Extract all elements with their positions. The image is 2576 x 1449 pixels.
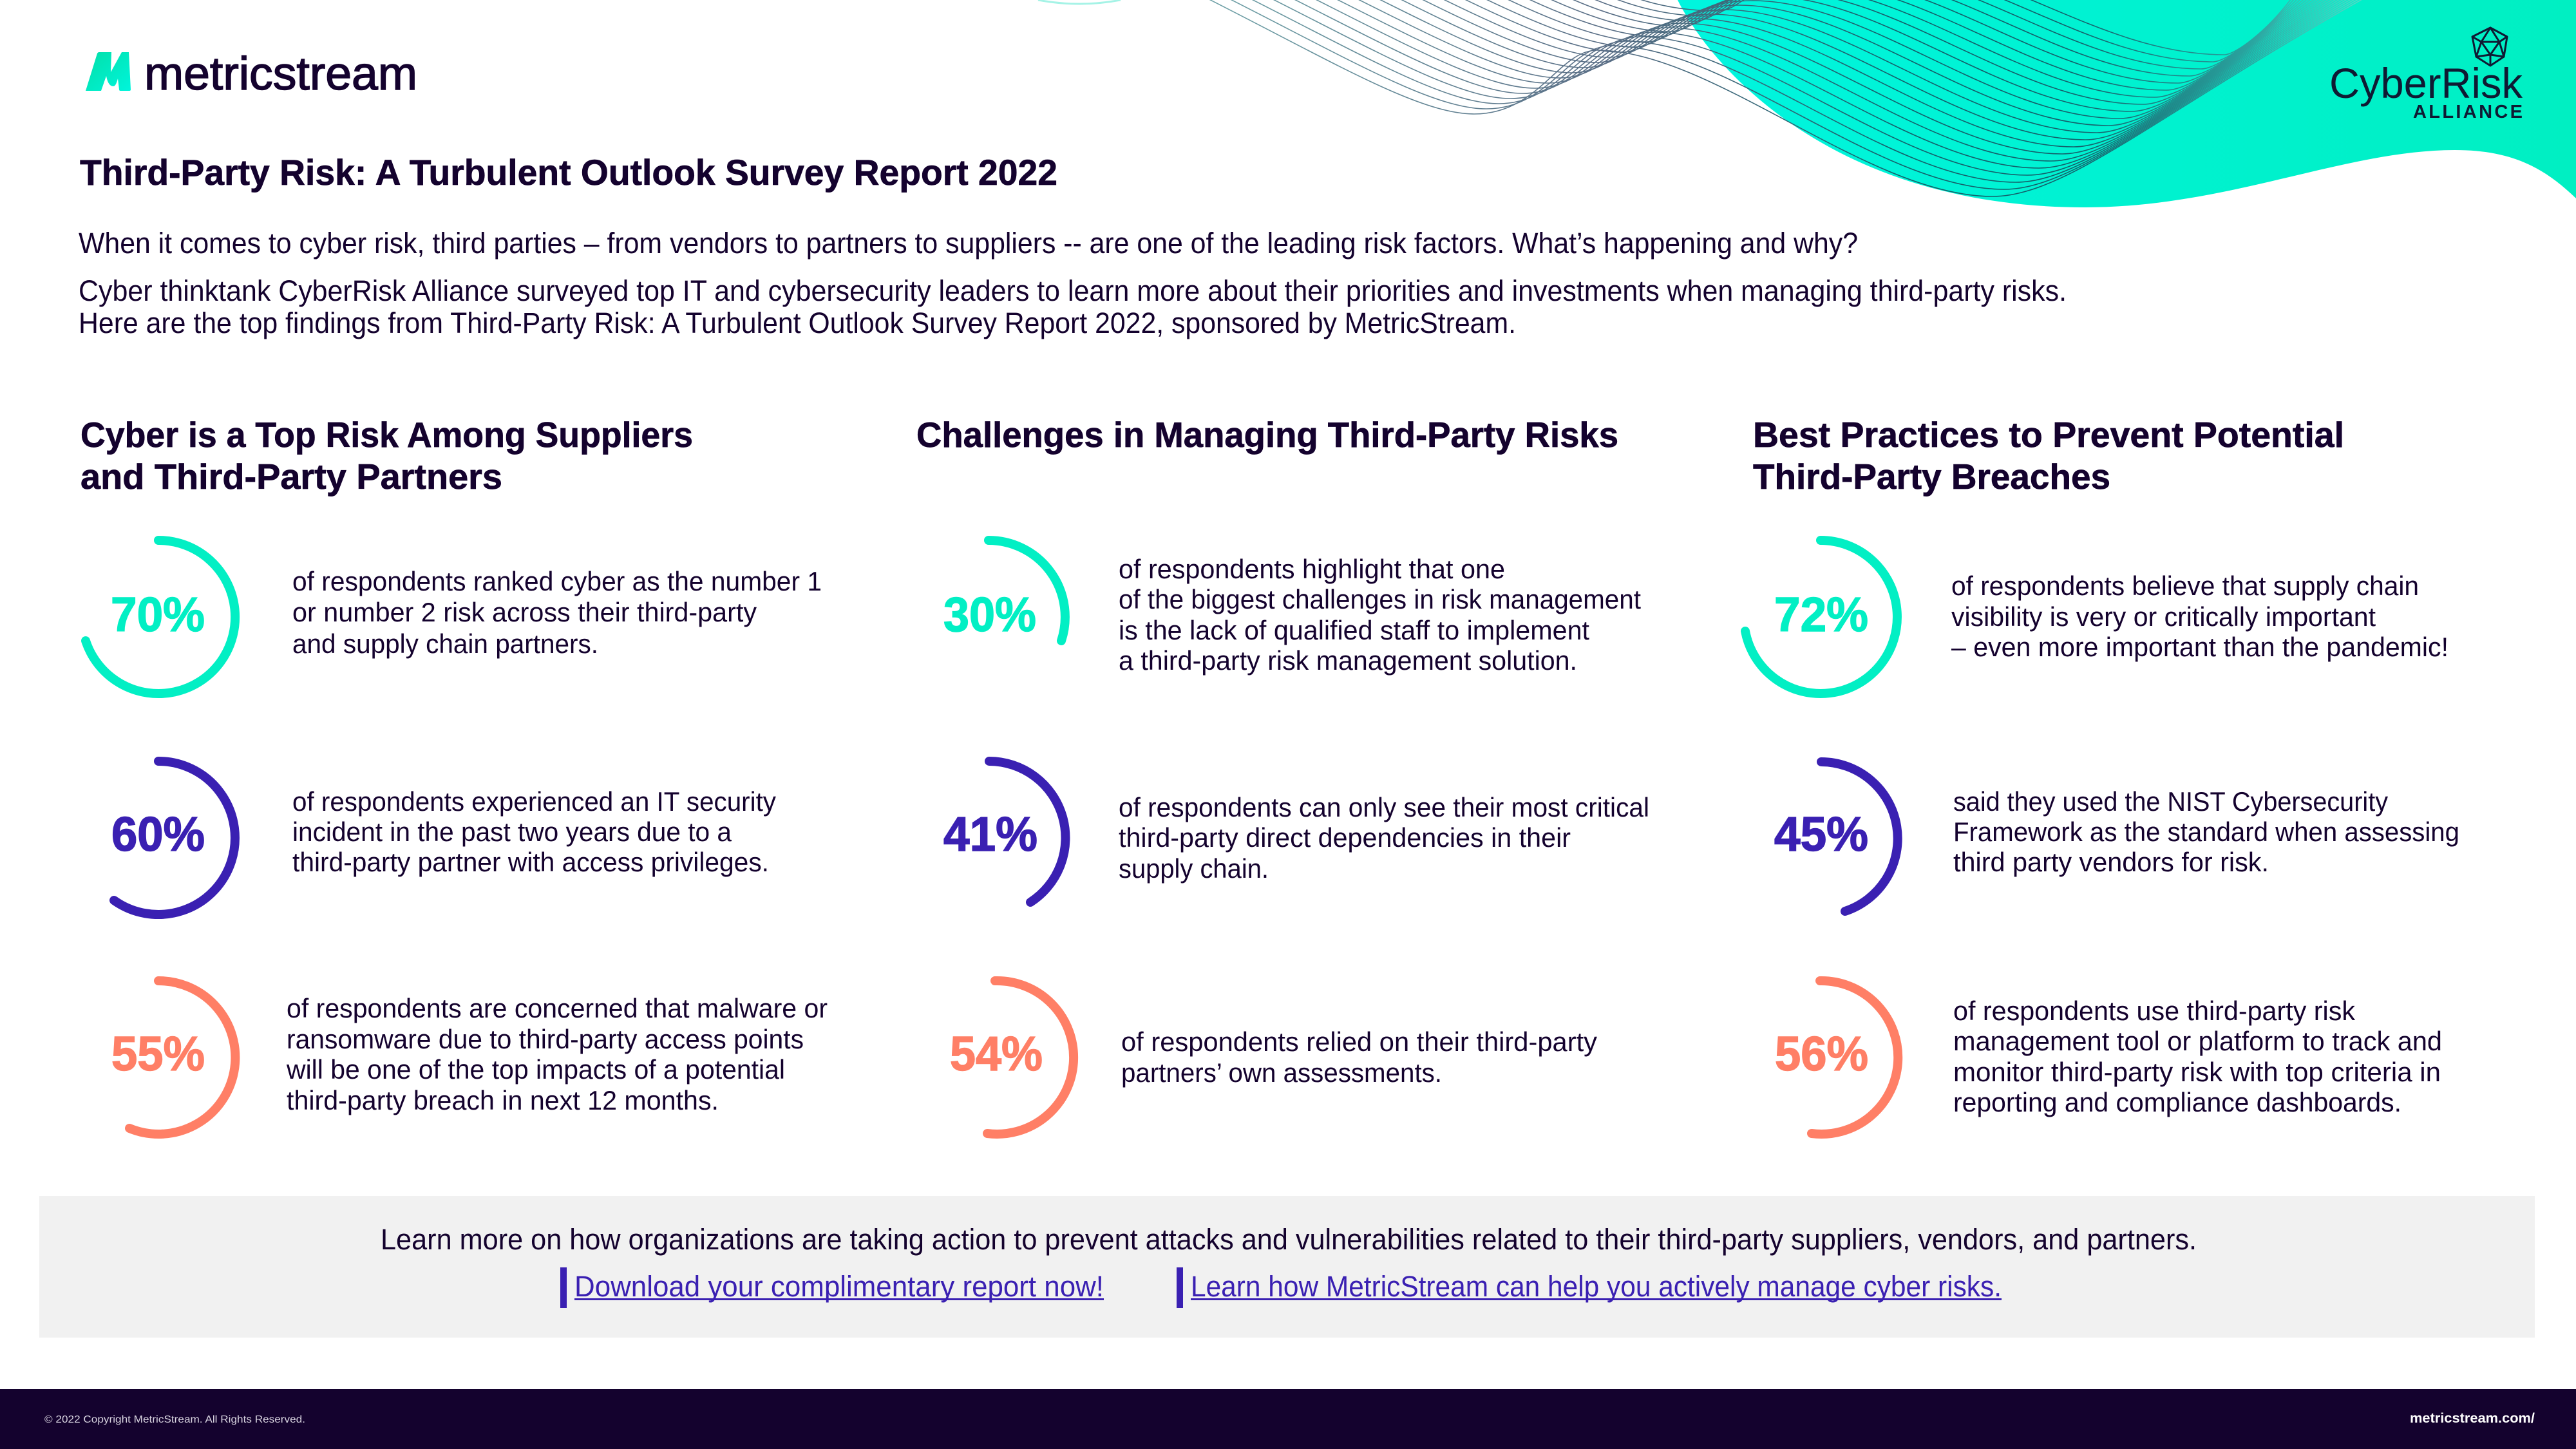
ring chart 70% bbox=[86, 540, 235, 694]
description: will be one of the top impacts of a potential bbox=[286, 1054, 785, 1084]
heading: Cyber is a Top Risk Among Suppliers bbox=[80, 415, 693, 455]
description: of respondents ranked cyber as the number 1 bbox=[292, 566, 822, 596]
ring chart 54% bbox=[987, 981, 1074, 1134]
value 72%: 72% bbox=[1774, 587, 1868, 641]
footer bar bbox=[0, 1389, 2576, 1449]
description: – even more important than the pandemic! bbox=[1951, 632, 2448, 662]
panel: best practices bbox=[1745, 415, 2459, 1134]
value 56%: 56% bbox=[1775, 1027, 1868, 1081]
description: Framework as the standard when assessing bbox=[1953, 817, 2459, 847]
description bbox=[1953, 786, 2459, 877]
decorative teal wave banner bbox=[1038, 0, 2576, 207]
description: of respondents use third-party risk bbox=[1953, 996, 2356, 1026]
description: is the lack of qualified staff to implement bbox=[1119, 615, 1589, 645]
description: of respondents experienced an IT security bbox=[292, 786, 776, 817]
ring chart 55% bbox=[129, 981, 235, 1134]
stat: 60% bbox=[111, 761, 776, 914]
description: and supply chain partners. bbox=[292, 629, 598, 659]
description: of respondents relied on their third-party bbox=[1121, 1027, 1597, 1057]
panel: cyber is a top risk bbox=[80, 415, 828, 1134]
description: partners’ own assessments. bbox=[1121, 1057, 1442, 1088]
description bbox=[292, 566, 822, 659]
description: of the biggest challenges in risk management bbox=[1119, 584, 1641, 614]
heading: and Third-Party Partners bbox=[80, 457, 502, 497]
stat: 45% bbox=[1774, 762, 2459, 911]
stat: 41% bbox=[943, 761, 1649, 902]
description: third-party breach in next 12 months. bbox=[287, 1085, 719, 1115]
heading: Third-Party Breaches bbox=[1753, 457, 2110, 497]
heading bbox=[80, 415, 693, 497]
link: download report: Download your complimentary report now! bbox=[574, 1270, 1104, 1303]
stat: 54% bbox=[950, 981, 1597, 1134]
description bbox=[1121, 1027, 1597, 1088]
stat: 30% bbox=[943, 540, 1641, 676]
description: a third-party risk management solution. bbox=[1119, 645, 1577, 676]
description: third-party direct dependencies in their bbox=[1119, 822, 1571, 853]
stat: 55% bbox=[111, 981, 828, 1134]
value 55%: 55% bbox=[111, 1027, 205, 1081]
value 41%: 41% bbox=[943, 807, 1037, 861]
description: of respondents can only see their most critical bbox=[1119, 792, 1649, 822]
description bbox=[286, 993, 828, 1115]
description: of respondents are concerned that malware or bbox=[287, 993, 828, 1023]
logo wordmark: metricstream bbox=[144, 48, 417, 100]
CyberRisk Alliance logo bbox=[2329, 28, 2523, 122]
ring chart 41% bbox=[989, 761, 1065, 902]
ring chart 72% bbox=[1745, 540, 1897, 694]
description: incident in the past two years due to a bbox=[292, 817, 732, 847]
description: of respondents highlight that one bbox=[1119, 554, 1505, 584]
description: ransomware due to third-party access points bbox=[287, 1024, 804, 1054]
heading: Best Practices to Prevent Potential bbox=[1753, 415, 2344, 455]
heading: Challenges in Managing Third-Party Risks bbox=[916, 415, 1618, 455]
ring chart 56% bbox=[1812, 981, 1898, 1134]
intro text bbox=[79, 227, 2067, 339]
stat: 56% bbox=[1775, 981, 2442, 1134]
website: metricstream.com/ bbox=[2410, 1411, 2535, 1426]
description: visibility is very or critically important bbox=[1951, 601, 2376, 632]
description: third-party partner with access privileges. bbox=[292, 847, 769, 877]
description: of respondents believe that supply chain bbox=[1951, 571, 2419, 601]
stat: 72% bbox=[1745, 540, 2448, 694]
panel: challenges in managing third-party risks bbox=[916, 415, 1649, 1134]
description: said they used the NIST Cybersecurity bbox=[1953, 786, 2388, 817]
description: management tool or platform to track and bbox=[1953, 1026, 2442, 1056]
value 54%: 54% bbox=[950, 1027, 1043, 1081]
description bbox=[1951, 571, 2448, 662]
intro text: Cyber thinktank CyberRisk Alliance surveyed top IT and cybersecurity leaders to learn more about their priorities and investments when managing third-party risks. bbox=[79, 274, 2067, 307]
description bbox=[1119, 792, 1649, 884]
description: supply chain. bbox=[1119, 853, 1269, 884]
description bbox=[292, 786, 776, 877]
ring chart 60% bbox=[114, 761, 235, 914]
ring chart 45% bbox=[1821, 762, 1898, 911]
value 30%: 30% bbox=[943, 587, 1036, 641]
stat: 70% bbox=[86, 540, 822, 694]
description bbox=[1953, 996, 2442, 1117]
value 70%: 70% bbox=[111, 587, 205, 641]
description: third party vendors for risk. bbox=[1953, 847, 2269, 877]
ring chart 30% bbox=[989, 540, 1065, 641]
MetricStream logo bbox=[86, 48, 417, 100]
icon: MetricStream M mark bbox=[86, 52, 131, 91]
call to action panel bbox=[39, 1196, 2535, 1338]
call to action text: Learn more on how organizations are taking action to prevent attacks and vulnerabilities related to their third-party suppliers, vendors, and partners. bbox=[381, 1223, 2197, 1256]
description: monitor third-party risk with top criteria in bbox=[1953, 1057, 2441, 1087]
description bbox=[1119, 554, 1641, 676]
copyright: © 2022 Copyright MetricStream. All Rights Reserved. bbox=[44, 1414, 305, 1425]
logo subtitle: ALLIANCE bbox=[2413, 102, 2523, 122]
title: Third-Party Risk: A Turbulent Outlook Survey Report 2022 bbox=[80, 152, 1057, 193]
logo wordmark: CyberRisk bbox=[2329, 59, 2523, 107]
value 60%: 60% bbox=[111, 807, 205, 861]
intro text: When it comes to cyber risk, third parties – from vendors to partners to suppliers -- are one of the leading risk factors. What’s happening and why? bbox=[79, 227, 1858, 260]
description: reporting and compliance dashboards. bbox=[1953, 1087, 2401, 1117]
value 45%: 45% bbox=[1774, 807, 1868, 861]
link: learn about MetricStream: Learn how MetricStream can help you actively manage cyber risks. bbox=[1191, 1270, 2002, 1303]
icon: polyhedron bbox=[2472, 28, 2507, 66]
heading bbox=[1753, 415, 2344, 497]
description: or number 2 risk across their third-party bbox=[292, 597, 757, 627]
intro text: Here are the top findings from Third-Party Risk: A Turbulent Outlook Survey Report 2022, sponsored by MetricStream. bbox=[79, 307, 1516, 339]
